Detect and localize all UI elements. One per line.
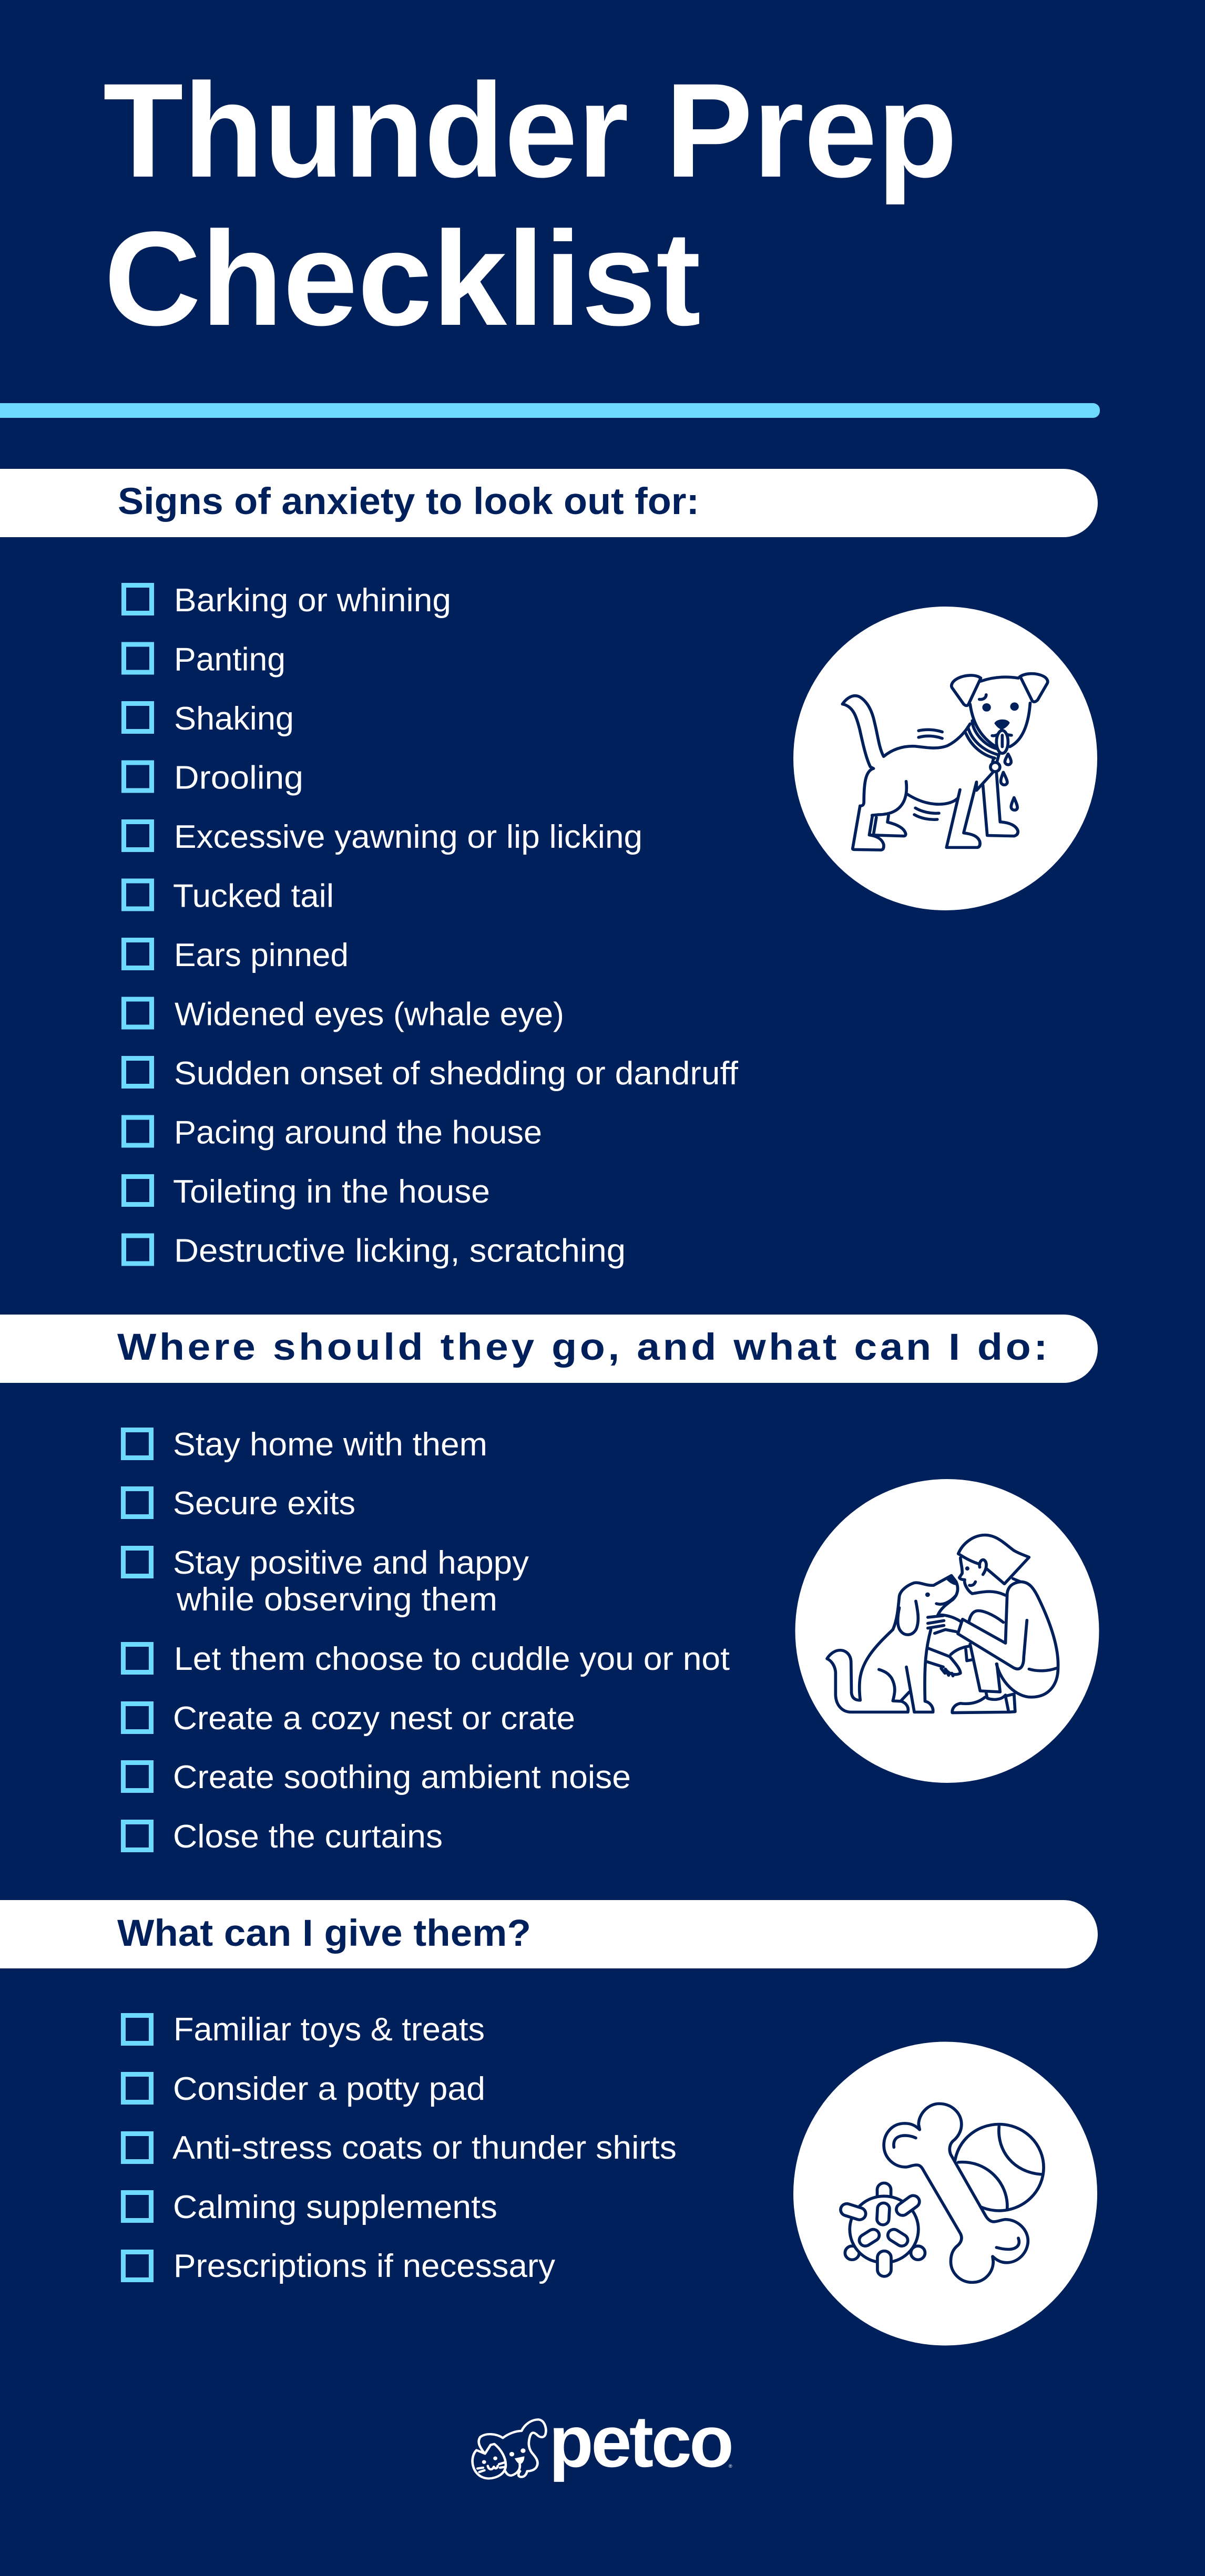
checklist item: stay positive: while observing them: [176, 1582, 497, 1618]
panel: what can I give them: [0, 1900, 1098, 2284]
checklist item: shaking: Shaking: [174, 701, 294, 737]
panel: signs of anxiety: [0, 469, 1098, 1269]
checklist item: destructive licking: Destructive licking, scratching: [174, 1233, 626, 1269]
title: Checklist: [104, 204, 701, 354]
checklist item: shedding: Sudden onset of shedding or dandruff: [174, 1055, 739, 1092]
checklist item: pacing: Pacing around the house: [174, 1114, 542, 1151]
checklist item: curtains: Close the curtains: [173, 1819, 443, 1855]
checklist item: toileting: Toileting in the house: [173, 1174, 490, 1210]
checklist item: cuddle: Let them choose to cuddle you or not: [174, 1641, 730, 1677]
checklist item: drooling: [124, 760, 303, 796]
icon: person with dog: [795, 1479, 1099, 1783]
panel: where should they go: [0, 1315, 1098, 1855]
checklist item: stay positive: [123, 1545, 529, 1618]
heading bar: signs of anxiety: [0, 469, 1098, 537]
checklist item: shaking: [124, 701, 294, 737]
heading bar: signs of anxiety: Signs of anxiety to look out for:: [118, 481, 699, 522]
checklist item: panting: Panting: [174, 641, 285, 678]
checklist item: stay positive: Stay positive and happy: [173, 1545, 529, 1581]
title divider: [0, 403, 1100, 418]
title: [103, 56, 957, 354]
checklist item: toys and treats: Familiar toys & treats: [173, 2011, 485, 2048]
title: Thunder Prep: [103, 56, 957, 206]
checklist item: ambient noise: Create soothing ambient noise: [173, 1759, 631, 1795]
checklist item: panting: [124, 641, 285, 678]
checklist item: widened eyes: Widened eyes (whale eye): [175, 997, 564, 1032]
checklist item: cozy nest: Create a cozy nest or crate: [173, 1700, 575, 1737]
heading bar: what can I give them: What can I give them?: [117, 1913, 531, 1954]
icon: cat and dog logo mark: [473, 2419, 546, 2479]
checklist item: barking: Barking or whining: [174, 582, 451, 619]
checklist item: yawning: Excessive yawning or lip licking: [174, 819, 642, 855]
registered mark: ®: [729, 2464, 732, 2469]
checklist item: ears pinned: Ears pinned: [174, 937, 349, 973]
heading bar: where should they go: [0, 1315, 1098, 1383]
checklist item: thunder shirts: Anti-stress coats or thunder shirts: [172, 2130, 677, 2166]
wordmark: petco: [549, 2401, 734, 2482]
checklist item: supplements: Calming supplements: [173, 2189, 497, 2225]
heading bar: what can I give them: [0, 1900, 1098, 1968]
icon: toys: [793, 2041, 1097, 2345]
logo: petco: [473, 2401, 734, 2482]
checklist item: secure exits: Secure exits: [173, 1485, 355, 1522]
checklist item: tucked tail: Tucked tail: [173, 878, 334, 915]
icon: anxious dog: [793, 607, 1097, 910]
checklist item: stay home: Stay home with them: [173, 1426, 487, 1463]
checklist item: prescriptions: Prescriptions if necessary: [173, 2248, 555, 2284]
checklist item: potty pad: Consider a potty pad: [173, 2071, 485, 2107]
heading bar: where should they go: Where should they go, and what can I do:: [117, 1327, 1050, 1368]
checklist item: drooling: Drooling: [174, 760, 303, 796]
